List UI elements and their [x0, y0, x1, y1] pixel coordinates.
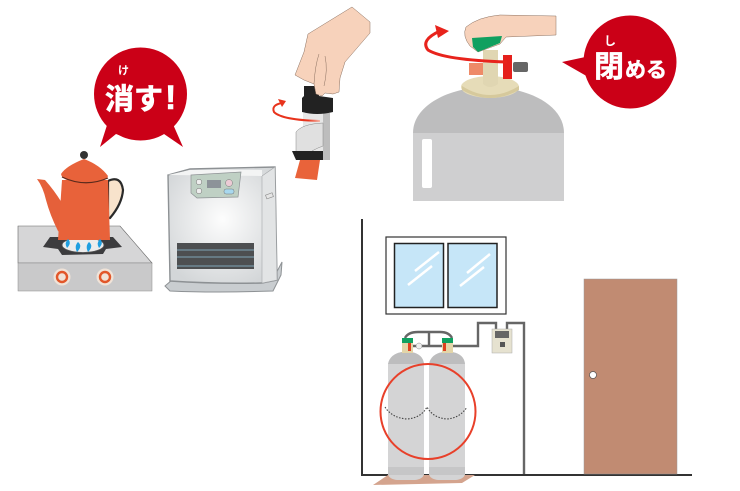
red highlight circle	[380, 364, 476, 459]
kettle	[37, 151, 123, 252]
speech bubble: 消す!	[94, 48, 187, 147]
door	[584, 279, 677, 474]
speech bubble: 消す!: す	[134, 84, 163, 116]
arrow	[426, 31, 507, 62]
speech bubble: 消す!: 消	[105, 83, 134, 116]
speech bubble: 消す!: け	[118, 64, 129, 77]
dotted chain	[385, 407, 467, 419]
window	[386, 237, 506, 314]
gas meter	[492, 329, 512, 353]
flames	[66, 239, 102, 252]
speech bubble: 閉める	[562, 16, 676, 108]
pipes	[405, 323, 524, 474]
icon: kettle on gas stove	[18, 151, 152, 291]
speech bubble: 消す!: !	[165, 79, 176, 117]
arrow	[273, 103, 320, 121]
icon: fan heater	[165, 167, 282, 292]
icon: hand turning cock	[273, 7, 370, 180]
valve	[461, 50, 528, 98]
icon: gas cylinder top with valve	[413, 15, 564, 201]
speech bubble: 閉める: める	[625, 59, 667, 82]
hand	[465, 15, 556, 52]
hand	[295, 7, 370, 96]
floor shadow	[373, 475, 475, 485]
room scene	[362, 219, 692, 485]
speech bubble: 閉める: し	[604, 34, 616, 48]
gas stove	[18, 226, 152, 291]
speech bubble: 閉める: 閉	[594, 51, 624, 84]
cylinder	[413, 87, 564, 133]
gas cylinders	[388, 338, 465, 480]
cock body	[292, 86, 333, 180]
wall and floor	[362, 219, 692, 475]
